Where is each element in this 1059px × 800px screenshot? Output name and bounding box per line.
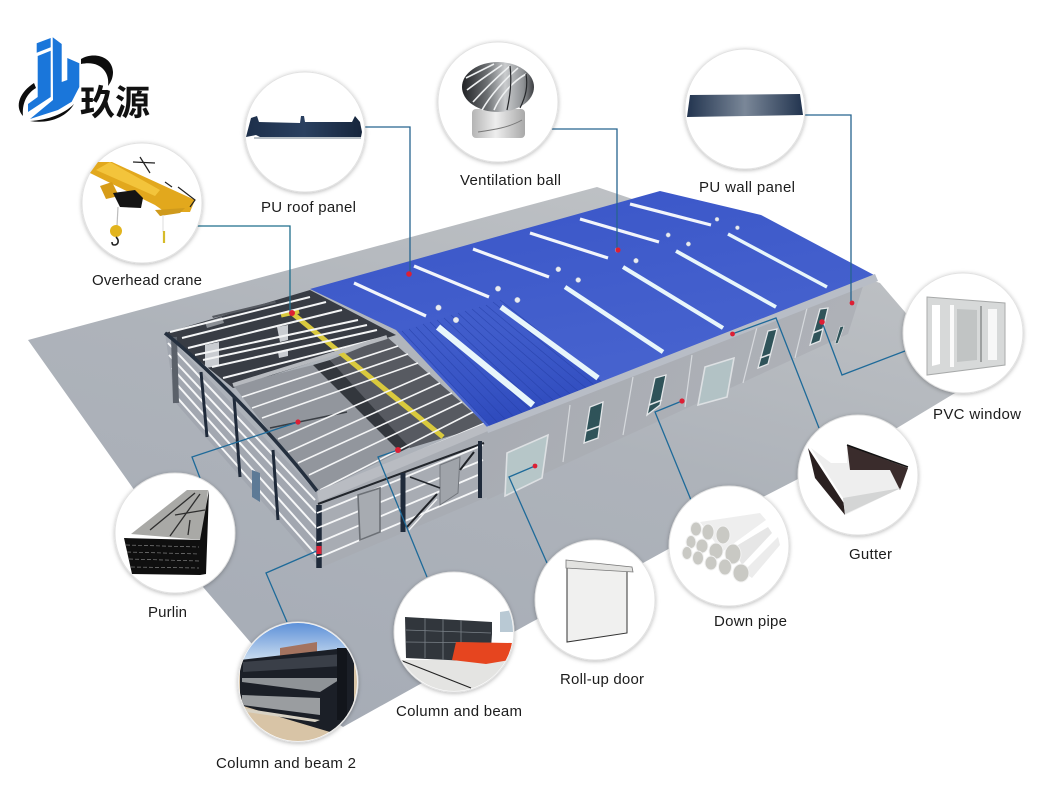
frame roof: light bay	[233, 365, 403, 493]
down pipe label: Down pipe	[714, 613, 787, 630]
logo	[19, 37, 150, 123]
ventilation circle	[438, 42, 558, 162]
building	[165, 191, 878, 568]
roof purlins	[170, 297, 485, 493]
column and beam image	[395, 610, 513, 692]
front columns	[319, 441, 480, 568]
gutter image	[808, 445, 908, 515]
crane image	[90, 157, 195, 245]
roof vents	[436, 217, 739, 323]
PU wall circle	[685, 49, 805, 169]
roll-up image	[566, 560, 633, 642]
leader: ventilation ball	[550, 129, 617, 250]
column and beam 2 circle	[238, 622, 358, 742]
crane circle	[82, 143, 202, 263]
callout: ventilation ball	[438, 42, 561, 189]
roll-up door on side wall	[505, 435, 548, 496]
callout: PU wall panel	[685, 49, 805, 196]
building: front end wall	[317, 428, 487, 568]
crane label: Overhead crane	[92, 272, 202, 289]
frame columns on side	[174, 337, 278, 520]
PU roof image	[246, 116, 362, 138]
leader: column and beam 2	[266, 550, 319, 622]
ventilation label: Ventilation ball	[460, 172, 561, 189]
frame roof: dark band	[313, 360, 412, 452]
building: wall pilasters	[563, 308, 807, 462]
callout: overhead crane	[82, 143, 202, 289]
leader lines	[192, 115, 905, 622]
logo: brand name: 玖源	[80, 84, 150, 123]
roof eave gutter	[486, 274, 878, 433]
girts over near column	[317, 511, 322, 557]
callout: PVC window	[903, 273, 1023, 423]
leader: down pipe	[655, 401, 691, 500]
small side door	[252, 470, 260, 502]
corrugated roof area	[400, 300, 602, 426]
leader: purlin	[192, 422, 298, 478]
leader: gutter	[732, 318, 819, 428]
front wall second door	[440, 457, 460, 505]
callout: column and beam	[394, 572, 522, 720]
skylights upper row	[354, 204, 711, 316]
callout: down pipe	[669, 486, 789, 630]
side wall door	[698, 358, 734, 405]
callout: column and beam 2	[216, 622, 358, 772]
front eave beam	[317, 423, 488, 502]
left rafter	[165, 333, 317, 491]
logo: black swooshes	[19, 55, 113, 122]
leader: PU wall panel	[802, 115, 851, 303]
crane end truck	[281, 311, 299, 315]
column and beam 2 label: Column and beam 2	[216, 755, 356, 772]
front wall door	[358, 488, 380, 540]
leader: column and beam	[378, 450, 427, 577]
yellow crane beam	[292, 313, 443, 437]
skylights lower row	[438, 234, 827, 405]
ground plane	[28, 187, 955, 727]
side windows	[584, 308, 844, 443]
callout: gutter	[798, 415, 918, 563]
callout: roll-up door	[535, 540, 655, 688]
leader: overhead crane	[197, 226, 290, 313]
front wall bracing	[407, 452, 474, 530]
PU roof label: PU roof panel	[261, 199, 356, 216]
building: long side wall	[487, 283, 864, 500]
side wall girts	[168, 343, 318, 557]
blue roof	[310, 191, 874, 427]
purlin circle	[115, 473, 235, 593]
roll-up circle	[535, 540, 655, 660]
frame roof: translucent skylights	[205, 325, 288, 368]
callout: purlin	[115, 473, 235, 621]
column and beam circle	[394, 572, 514, 692]
frame roof: upper dark bay	[165, 290, 396, 388]
purlin image	[124, 490, 209, 575]
column and beam label: Column and beam	[396, 703, 522, 720]
leader: PU roof panel	[364, 127, 410, 272]
frame roof: lower right bay	[330, 337, 487, 448]
PU wall label: PU wall panel	[699, 179, 795, 196]
gutter circle	[798, 415, 918, 535]
column and beam 2 image	[238, 622, 358, 742]
PVC label: PVC window	[933, 406, 1021, 423]
callout: PU roof panel	[245, 72, 365, 216]
down pipe image	[682, 513, 780, 582]
logo: blue letters	[28, 37, 79, 119]
down pipe circle	[669, 486, 789, 606]
PU roof circle	[245, 72, 365, 192]
PVC circle	[903, 273, 1023, 393]
leader: PVC window	[822, 322, 905, 375]
ventilation image	[462, 62, 534, 138]
building: left side wall	[165, 333, 320, 568]
purlin label: Purlin	[148, 604, 187, 621]
leader: roll-up door	[509, 466, 547, 563]
roll-up label: Roll-up door	[560, 671, 644, 688]
PVC image	[927, 297, 1005, 375]
gutter label: Gutter	[849, 546, 892, 563]
red marker dots	[289, 247, 854, 554]
frame roof: top edge gray strips	[205, 301, 276, 328]
front wall girts	[320, 445, 483, 557]
front rafter	[318, 443, 484, 504]
PU wall image	[687, 94, 803, 117]
